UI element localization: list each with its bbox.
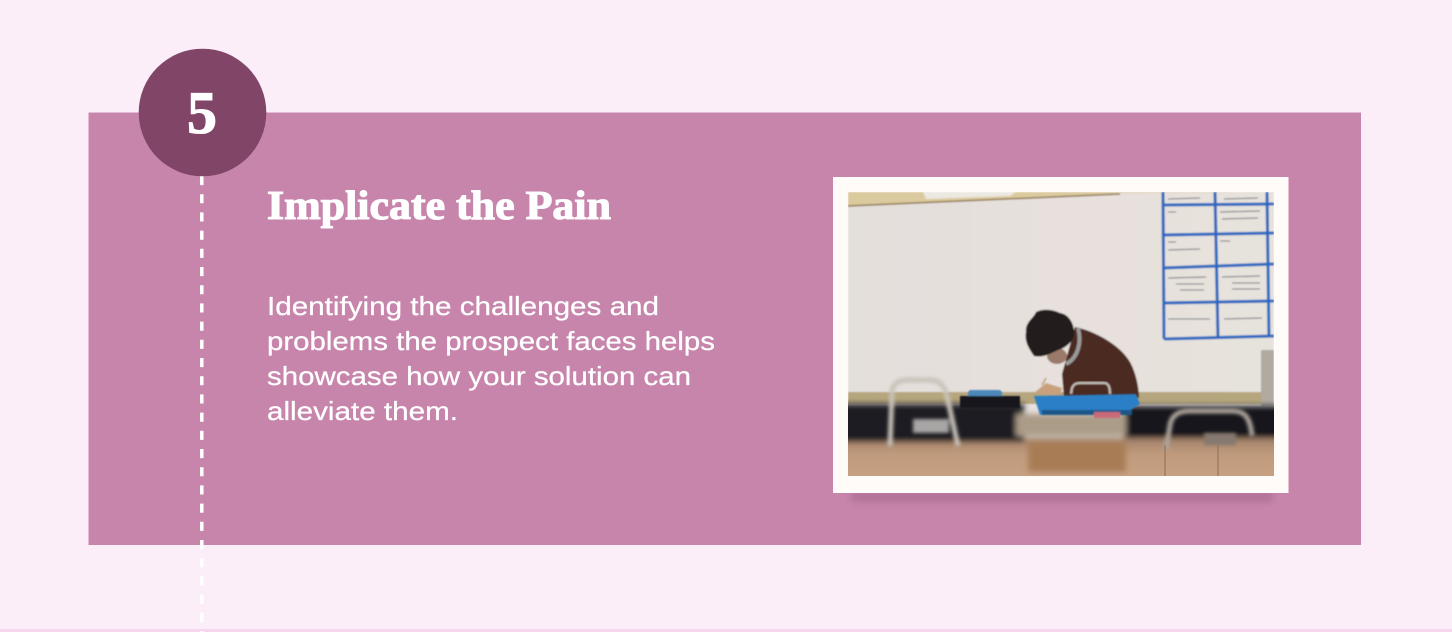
- body text: showcase how your solution can: [267, 361, 691, 391]
- dark chairs row right: [1124, 406, 1284, 438]
- blurred foreground band: [840, 404, 1284, 482]
- chair leg lines: [1164, 445, 1166, 476]
- dashed timeline connector: [200, 176, 204, 632]
- small blue box behind: [968, 390, 1002, 399]
- panel: step card: [88, 112, 1361, 545]
- calendar handwriting: [1168, 198, 1262, 319]
- student's hair: [1026, 310, 1074, 357]
- body text: Identifying the challenges and: [267, 291, 659, 321]
- dark backrest: [960, 396, 1020, 408]
- body text: problems the prospect faces helps: [267, 326, 715, 356]
- blue pencil case: [1034, 394, 1140, 415]
- pencil case handle: [1071, 383, 1110, 394]
- front desk: [1016, 414, 1126, 436]
- grey object at right edge: [1261, 350, 1274, 406]
- bottom edge strip: [0, 629, 1452, 632]
- student's face: [1047, 348, 1067, 364]
- lower board ledge: [848, 392, 1274, 404]
- hand and pencil: [1034, 383, 1062, 396]
- top wall and tray: [848, 192, 1230, 206]
- body text: [267, 291, 715, 426]
- whiteboard wall: [848, 192, 1274, 416]
- dark student sweater: [1062, 327, 1139, 398]
- table foreground: [840, 438, 1284, 482]
- blue taped calendar: [1162, 192, 1274, 339]
- step number badge: [139, 49, 266, 176]
- step number badge: 5: [187, 80, 217, 146]
- heading: Implicate the Pain: [267, 182, 611, 228]
- blurred chair frame left: [890, 380, 958, 446]
- headphones: [1066, 328, 1080, 364]
- blurred chair frame right: [1166, 411, 1252, 450]
- desk reflection: [1028, 442, 1126, 472]
- photo frame with shadow: [833, 177, 1288, 502]
- photo: student at a desk in a classroom: [840, 192, 1284, 482]
- frame shadow: [850, 492, 1274, 502]
- white frame: [833, 177, 1288, 493]
- body text: alleviate them.: [267, 396, 458, 426]
- dark chairs row left: [840, 404, 1024, 442]
